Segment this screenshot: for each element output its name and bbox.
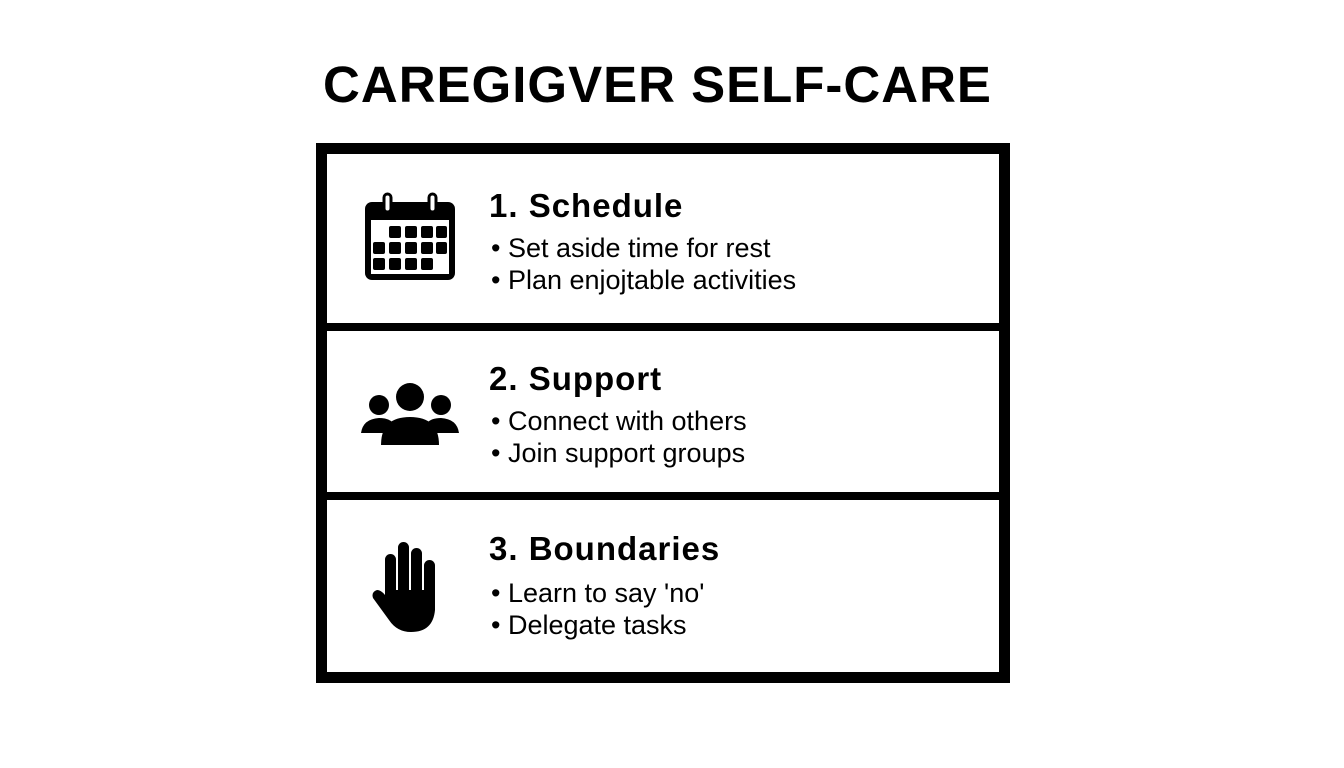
bullets: support <box>491 406 747 468</box>
heading: boundaries: 3. Boundaries <box>489 530 720 567</box>
bullets: boundaries <box>491 578 704 640</box>
panel: self-care list <box>316 143 1010 683</box>
bullets: boundaries: • Learn to say 'no' <box>491 578 704 608</box>
section: support <box>361 360 747 468</box>
icon: hand <box>372 542 435 632</box>
bullets: boundaries: • Delegate tasks <box>491 610 687 640</box>
bullets: support: • Join support groups <box>491 438 745 468</box>
section: schedule <box>365 187 796 295</box>
title: CAREGIGVER SELF-CARE <box>323 56 992 113</box>
heading: schedule: 1. Schedule <box>489 187 683 224</box>
bullets: schedule <box>491 233 796 295</box>
icon: calendar <box>365 192 455 280</box>
bullets: schedule: • Set aside time for rest <box>491 233 771 263</box>
section: boundaries <box>372 530 720 640</box>
bullets: schedule: • Plan enjojtable activities <box>491 265 796 295</box>
bullets: support: • Connect with others <box>491 406 747 436</box>
icon: people <box>361 383 459 445</box>
heading: support: 2. Support <box>489 360 662 397</box>
